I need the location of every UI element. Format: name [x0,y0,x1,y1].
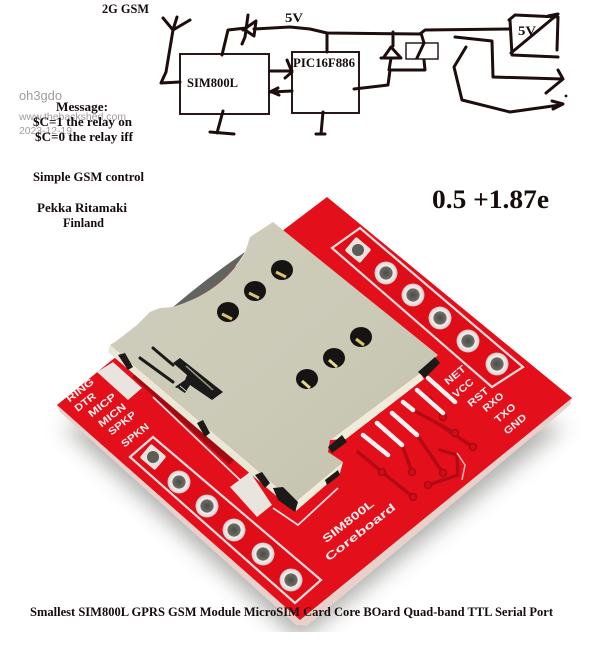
right pin labels: TXO [493,402,519,426]
solder pads near slot [97,362,272,517]
right pin labels [443,364,529,437]
right pin labels: GND [502,412,529,437]
tray slot cut-out [140,348,223,400]
5V regulator box [509,14,558,57]
contact holes [217,260,372,389]
left pin labels: MICN [97,402,129,430]
left header pads [140,444,302,592]
right pin labels: VCC [451,377,476,401]
PIC16F886 box [292,33,359,113]
arrow: PIC to SIM800L [270,88,292,95]
price: 0.5 +1.87e [432,185,549,214]
ground: PIC [316,112,325,134]
right pin labels: NET [443,364,468,388]
SIM slot pins [363,378,455,455]
PIC16F886 box: PIC16F886 [293,55,355,70]
author: Finland [63,215,105,230]
board photo: SIM800L core board [57,197,572,640]
project title: Simple GSM control [33,169,144,184]
watermark: oh3gdo [19,88,62,103]
ground: SIM800L [210,111,234,134]
drop shadow [62,420,565,640]
board name [320,498,398,564]
left pin labels: DTR [73,391,99,415]
black clips [118,353,440,512]
arrow: SIM800L to PIC [270,60,292,78]
message text: $C=1 the relay on [33,114,133,129]
right pin labels: RXO [481,391,507,415]
copper traces [358,398,473,497]
PCB side edge [57,398,572,626]
antenna [161,17,190,83]
circuit schematic [161,10,567,134]
red PCB [57,197,572,620]
board name: SIM800L [320,498,377,546]
author: Pekka Ritamaki [37,200,127,215]
left pin labels: SPKP [107,409,139,438]
SIM800L box: SIM800L [187,75,238,90]
right pin labels: RST [466,386,491,410]
relay driver and coil [354,32,438,89]
relay switch and output arrows [454,37,567,112]
watermark [18,88,126,137]
left pin labels: SPKN [120,422,152,450]
shell left rim [108,345,295,512]
message text [33,99,134,144]
message text: $C=0 the relay iff [35,129,134,144]
SIM800L box [180,54,269,114]
left header frame [130,437,321,603]
right header pads [345,237,508,376]
diode and 5V supply line [222,10,510,55]
traces via pads [378,414,476,500]
diode and 5V supply line: 5V [285,10,304,25]
caption: Smallest SIM800L GPRS GSM Module MicroSIM Card Core BOard Quad-band TTL Serial Port [30,604,554,619]
dark shadow under shell [135,374,232,462]
SIM holder metal shell [110,222,438,502]
SIM tray behind [173,252,245,307]
silkscreen outline around slot [153,397,338,525]
message text: Message: [56,99,108,114]
shell front rim [295,373,424,511]
board name: Coreboard [323,502,398,564]
5V regulator box: 5V [518,23,537,38]
trace silk line [457,453,465,480]
watermark: 2023-12-19 [19,125,72,137]
right header frame [332,228,523,387]
watermark: www.thebackshed.com [18,111,126,123]
left pin labels: RING [65,376,97,405]
left pin labels [65,376,152,450]
left pin labels: MICP [87,391,119,420]
title: 2G GSM: 2G GSM [102,1,149,16]
author [37,200,127,230]
